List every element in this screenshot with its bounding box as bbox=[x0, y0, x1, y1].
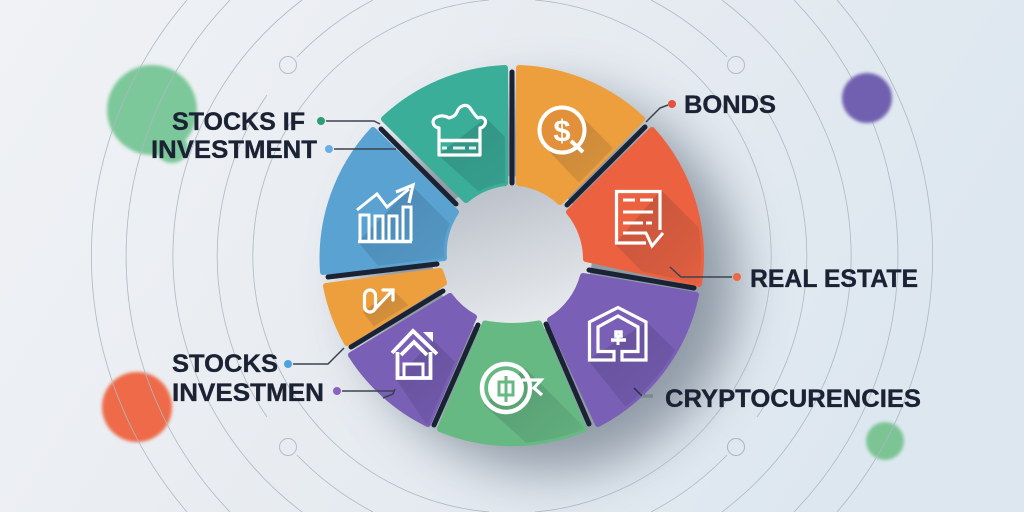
label: stocks if bbox=[172, 108, 380, 136]
decorative green blob bbox=[107, 65, 197, 163]
donut ring bbox=[323, 68, 710, 455]
icon: dollar coin: $ bbox=[553, 113, 571, 148]
icon: document bbox=[616, 192, 663, 246]
label: stocks: STOCKS bbox=[172, 350, 278, 378]
segment: orange bonds bbox=[519, 68, 650, 205]
icon: rounded arrow bbox=[364, 290, 393, 312]
label: bonds: BONDS bbox=[684, 91, 776, 119]
segment: red real estate bbox=[569, 130, 710, 290]
label: investmen: INVESTMEN bbox=[172, 379, 324, 407]
segment: purple cryptocurrencies bbox=[550, 276, 705, 425]
segment: blue bbox=[323, 130, 470, 280]
segment: small orange bbox=[326, 271, 444, 343]
small ring node bottom left bbox=[280, 438, 296, 456]
icon: house bbox=[392, 331, 437, 378]
label: investment bbox=[151, 136, 396, 164]
decorative red blob bbox=[102, 372, 172, 442]
small ring node top left bbox=[280, 56, 296, 74]
icon: growth chart bbox=[357, 185, 413, 242]
label: bonds bbox=[646, 91, 776, 122]
label: real estate: REAL ESTATE bbox=[750, 265, 918, 293]
segment: green bbox=[440, 324, 590, 455]
small ring node top right bbox=[728, 56, 744, 74]
segment: teal bbox=[381, 65, 508, 203]
label: investmen bbox=[172, 379, 395, 407]
separators bbox=[328, 72, 694, 425]
label: stocks bbox=[172, 348, 344, 378]
label: real estate bbox=[670, 265, 918, 293]
label: investment: INVESTMENT bbox=[151, 136, 317, 164]
label: cryptocurencies: CRYPTOCURENCIES bbox=[665, 385, 921, 413]
segment: purple stocks investment bbox=[351, 296, 480, 430]
icon: house outline bbox=[590, 308, 646, 360]
decorative purple blob bbox=[842, 73, 892, 123]
icon: coin with arrow bbox=[482, 364, 542, 412]
ring centre hole bbox=[432, 176, 592, 336]
small ring node bottom right bbox=[728, 438, 744, 456]
decorative small green blob bbox=[866, 422, 904, 460]
label: stocks if: STOCKS IF bbox=[172, 108, 305, 136]
icon: chef hat bbox=[433, 105, 485, 155]
ring drop shadow bbox=[358, 92, 738, 472]
